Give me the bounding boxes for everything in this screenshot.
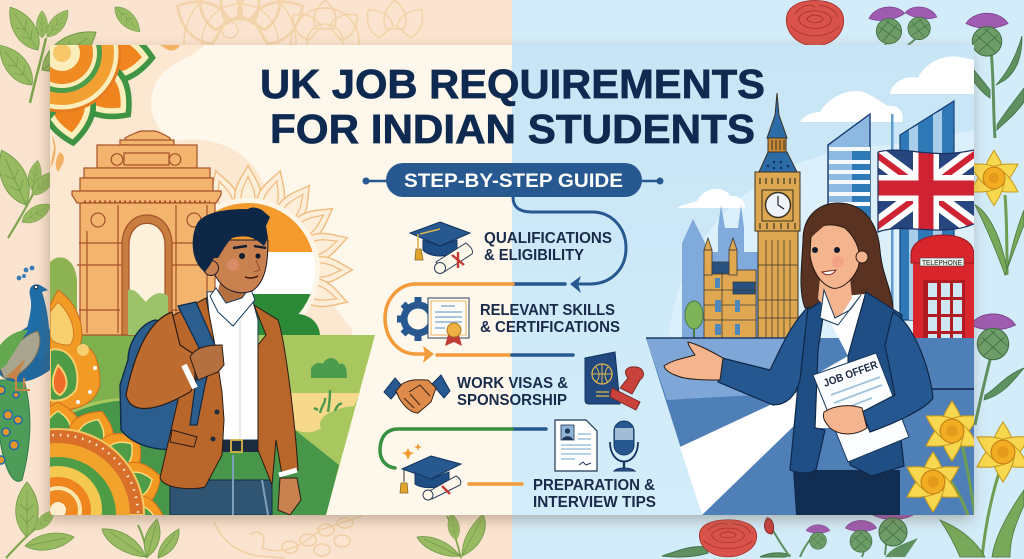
- step 3 label: WORK VISAS &: [457, 375, 568, 392]
- step 2 label: [480, 302, 620, 336]
- landscape: mid-green band: [71, 336, 134, 410]
- head: [208, 240, 268, 293]
- neck: [216, 282, 250, 315]
- woman face: [810, 225, 859, 288]
- step-by-step guide pill: [362, 163, 664, 197]
- backpack strap: [178, 302, 215, 425]
- icon: microphone: [610, 421, 638, 471]
- orange mandala, top left: [50, 45, 156, 146]
- left green bush: [50, 257, 77, 311]
- step 3 label: SPONSORSHIP: [457, 392, 567, 409]
- card left half: [151, 45, 512, 515]
- woman hair front: [811, 210, 872, 250]
- cloud above towers: [800, 91, 903, 122]
- arrow: pill to step 1 loop: [513, 197, 626, 284]
- hand holding paper: [823, 406, 867, 434]
- small tree: [685, 301, 703, 338]
- step 4 label: [533, 477, 656, 511]
- mandala behind student: [214, 164, 354, 315]
- connector: row 4 green curve: [380, 429, 546, 468]
- backpack: [119, 319, 178, 450]
- step 4 label: PREPARATION &: [533, 477, 655, 494]
- connector: orange dash to step 4: [469, 482, 522, 486]
- peacock outline motif, bottom: [214, 516, 362, 558]
- jacket left front: [790, 298, 826, 473]
- arrow head orange: [423, 346, 434, 363]
- tea leaves, mid left: [0, 145, 60, 238]
- hair back: [801, 203, 893, 308]
- white shirt: [813, 294, 866, 428]
- woman neck and collar: [818, 278, 852, 325]
- icon: handshake: [384, 375, 450, 413]
- cloud top right: [890, 56, 974, 94]
- jacket right arm: [862, 312, 933, 432]
- landscape: sand path: [288, 393, 360, 432]
- blue flower sprig: [17, 266, 34, 280]
- jacket pocket and buttons: [170, 430, 197, 447]
- tea leaves, bottom left: [6, 482, 179, 558]
- trousers: [170, 480, 272, 515]
- hand on strap: [190, 345, 224, 380]
- icon: passport and stamp: [585, 352, 643, 410]
- connector: row 3 top: [437, 353, 573, 357]
- green bush under flag: [264, 314, 320, 335]
- small green bush: [311, 358, 347, 378]
- skyscraper one: [827, 112, 871, 220]
- step-by-step guide pill: STEP-BY-STEP GUIDE: [404, 170, 623, 192]
- icon: resume document: [555, 420, 597, 471]
- hair: [193, 207, 270, 272]
- step 4 label: INTERVIEW TIPS: [533, 494, 656, 511]
- watermark sparkle: [983, 488, 1020, 545]
- UK pavement: [646, 338, 974, 515]
- outer bottom rose: [662, 518, 790, 557]
- India Gate: [72, 131, 221, 335]
- step 2 label: RELEVANT SKILLS: [480, 302, 615, 319]
- background: Indian half: [0, 0, 512, 559]
- bush between gate legs: [128, 290, 168, 335]
- connector: blue to orange row 2: [385, 284, 565, 354]
- Big Ben: [755, 93, 800, 338]
- professional woman figure: [664, 203, 933, 515]
- collar: [210, 287, 255, 326]
- cloud near parliament: [677, 189, 745, 208]
- outer daffodil, right: [965, 150, 1024, 275]
- job offer paper: [813, 353, 909, 462]
- step 1 label: [484, 230, 612, 264]
- right wrist and hand: [278, 478, 301, 515]
- parliament building: [704, 238, 756, 338]
- grass tuft: [314, 390, 342, 413]
- red telephone box: [910, 234, 974, 338]
- belt: [218, 440, 258, 452]
- arrow head to second row: [570, 276, 581, 293]
- daffodils on card: [906, 400, 974, 515]
- title: UK JOB REQUIREMENTS: [260, 61, 765, 107]
- small orange motifs: [50, 45, 180, 172]
- jacket left front: [160, 298, 224, 489]
- outer thistle, right top: [966, 13, 1024, 138]
- peacock: [0, 284, 50, 481]
- outer bottom thistles: [800, 505, 918, 557]
- step 2 label: & CERTIFICATIONS: [480, 319, 620, 336]
- title: [260, 61, 765, 152]
- icon: sparkles, cap and diploma: [400, 443, 461, 500]
- outstretched hand: [664, 342, 723, 380]
- step 1 label: QUALIFICATIONS: [484, 230, 612, 247]
- title: FOR INDIAN STUDENTS: [270, 106, 755, 152]
- job offer text: JOB OFFER: [822, 359, 880, 390]
- UK background: pale dome: [668, 130, 974, 340]
- jacket left sleeve: [126, 312, 195, 408]
- student figure: [120, 207, 301, 515]
- orange mandala, bottom left: [50, 402, 164, 515]
- outer top rose: [786, 0, 844, 46]
- icon: graduation cap and diploma: [410, 222, 473, 274]
- tea leaves, upper left: [0, 1, 145, 103]
- step 3 label: [457, 375, 568, 409]
- step 1 label: & ELIGIBILITY: [484, 247, 584, 264]
- outer daffodil, lower right: [940, 422, 1024, 557]
- telephone sign text: TELEPHONE: [922, 260, 962, 267]
- outer thistle, right lower: [971, 314, 1024, 425]
- icon: gear and certificate: [397, 297, 469, 346]
- skirt: [793, 470, 900, 515]
- distant cathedral: [682, 205, 760, 340]
- Indian flag circle: [216, 203, 315, 314]
- paisley motif: [50, 290, 100, 410]
- jacket right front: [848, 292, 904, 476]
- background: UK half: [512, 0, 1024, 559]
- landscape: light ground: [50, 335, 375, 515]
- peach wave shape: [50, 45, 352, 345]
- card right half: [512, 45, 974, 515]
- skyscraper two: [891, 101, 954, 334]
- landscape: dark hill: [50, 400, 339, 515]
- UK flag: [877, 149, 974, 233]
- leaf pair, bottom centre: [417, 512, 485, 558]
- shirt: [207, 290, 258, 440]
- shirt cuff: [184, 365, 195, 388]
- decorative mandala outlines, top: [168, 0, 430, 98]
- jacket right front: [254, 305, 298, 485]
- outer top thistles: [868, 5, 938, 46]
- jacket outstretched arm: [718, 307, 808, 405]
